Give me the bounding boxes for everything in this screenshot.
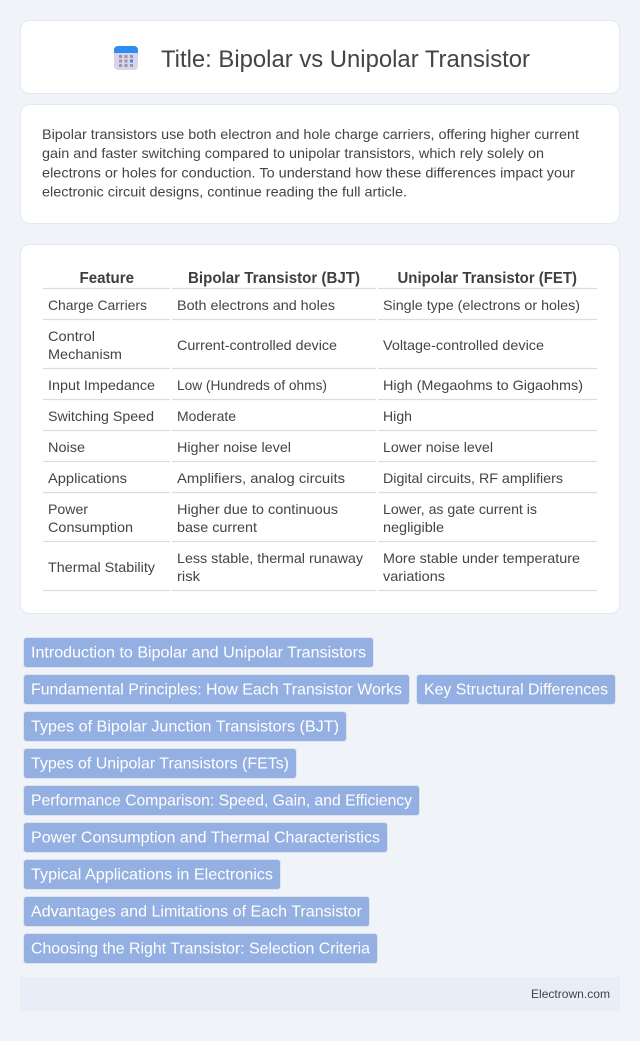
row: switching speed: Moderate bbox=[177, 408, 236, 424]
row: noise: Noise bbox=[48, 439, 85, 455]
tag: applications bbox=[24, 860, 280, 890]
row: input impedance: High (Megaohms to Gigaohms) bbox=[383, 377, 583, 393]
row: control mechanism: Current-controlled device bbox=[177, 337, 337, 353]
tag: performance comparison bbox=[24, 786, 420, 816]
table header: Unipolar Transistor (FET) bbox=[398, 270, 577, 287]
text block: introduction paragraph: electronic circuit designs, continue reading the full article. bbox=[42, 184, 407, 200]
tag: advantages: Advantages and Limitations of Each Transistor bbox=[31, 904, 363, 920]
tag: introduction bbox=[24, 638, 374, 668]
row: charge carriers: Charge Carriers bbox=[48, 297, 147, 313]
panel: topic tags bbox=[24, 638, 616, 964]
tag: power and thermal: Power Consumption and Thermal Characteristics bbox=[31, 830, 380, 846]
row: thermal stability: Less stable, thermal runaway bbox=[177, 550, 363, 566]
tag: types of FET: Types of Unipolar Transistors (FETs) bbox=[31, 756, 289, 772]
row: control mechanism bbox=[48, 328, 544, 362]
tag: fundamental principles: Fundamental Principles: How Each Transistor Works bbox=[31, 682, 402, 698]
tag: types of BJT: Types of Bipolar Junction Transistors (BJT) bbox=[31, 718, 339, 736]
panel: title header bbox=[20, 20, 620, 94]
tag: selection criteria bbox=[24, 934, 378, 964]
row: input impedance bbox=[48, 377, 583, 393]
tag: structural differences bbox=[416, 674, 616, 704]
text block: introduction paragraph: gain and faster switching compared to unipolar transistors, which rely solely on bbox=[42, 145, 544, 161]
row: thermal stability: More stable under temperature bbox=[383, 550, 580, 566]
row: charge carriers bbox=[48, 297, 580, 313]
row: switching speed: Switching Speed bbox=[48, 408, 154, 424]
row: power consumption: negligible bbox=[383, 519, 444, 535]
tag: types of FET bbox=[24, 748, 296, 778]
tag: structural differences: Key Structural Differences bbox=[424, 682, 608, 698]
row: applications: Amplifiers, analog circuits bbox=[177, 470, 345, 486]
row: input impedance: Input Impedance bbox=[48, 377, 155, 393]
row: applications: Digital circuits, RF amplifiers bbox=[383, 470, 563, 486]
tag: advantages bbox=[24, 896, 370, 926]
tag: power and thermal bbox=[24, 822, 388, 852]
row: power consumption: Power bbox=[48, 501, 88, 517]
tag: introduction: Introduction to Bipolar and Unipolar Transistors bbox=[31, 644, 366, 662]
row: thermal stability: variations bbox=[383, 568, 445, 584]
row: input impedance: Low (Hundreds of ohms) bbox=[177, 377, 327, 393]
row: thermal stability bbox=[48, 550, 580, 584]
footer bbox=[20, 977, 620, 1011]
footer: Electrown.com bbox=[531, 987, 610, 1001]
tag: fundamental principles bbox=[24, 674, 410, 704]
table header bbox=[80, 270, 577, 287]
table header: Bipolar Transistor (BJT) bbox=[188, 270, 360, 287]
row: thermal stability: Thermal Stability bbox=[48, 559, 155, 575]
row: power consumption: Higher due to continuous bbox=[177, 501, 338, 517]
row: power consumption: Consumption bbox=[48, 519, 133, 535]
text block: introduction paragraph bbox=[42, 126, 579, 200]
row: power consumption: Lower, as gate current is bbox=[383, 501, 537, 517]
panel: introduction bbox=[20, 104, 620, 224]
row: noise bbox=[48, 439, 493, 455]
row: applications: Applications bbox=[48, 470, 127, 486]
row: power consumption bbox=[48, 501, 537, 535]
table header: Feature bbox=[80, 270, 134, 287]
title: Title: Bipolar vs Unipolar Transistor bbox=[161, 46, 530, 73]
row: applications bbox=[48, 470, 563, 486]
text block: introduction paragraph: electrons or holes for conduction. To understand how these differences impact your bbox=[42, 164, 575, 180]
row: control mechanism: Mechanism bbox=[48, 346, 122, 362]
row: power consumption: base current bbox=[177, 519, 257, 535]
text block: introduction paragraph: Bipolar transistors use both electron and hole charge carriers, offering higher current bbox=[42, 126, 579, 142]
row: charge carriers: Single type (electrons or holes) bbox=[383, 297, 580, 313]
row: noise: Higher noise level bbox=[177, 439, 291, 455]
tag: performance comparison: Performance Comparison: Speed, Gain, and Efficiency bbox=[31, 792, 412, 810]
tag: selection criteria: Choosing the Right Transistor: Selection Criteria bbox=[31, 940, 370, 958]
row: control mechanism: Control bbox=[48, 328, 95, 344]
row: charge carriers: Both electrons and holes bbox=[177, 297, 335, 313]
panel: comparison table bbox=[20, 244, 620, 614]
row: switching speed: High bbox=[383, 408, 412, 424]
tag: applications: Typical Applications in Electronics bbox=[31, 866, 273, 884]
icon: calendar bbox=[114, 46, 138, 70]
row: noise: Lower noise level bbox=[383, 439, 493, 455]
row: thermal stability: risk bbox=[177, 568, 201, 584]
row: control mechanism: Voltage-controlled device bbox=[383, 337, 544, 353]
tag: types of BJT bbox=[24, 712, 346, 742]
row: switching speed bbox=[48, 408, 412, 424]
